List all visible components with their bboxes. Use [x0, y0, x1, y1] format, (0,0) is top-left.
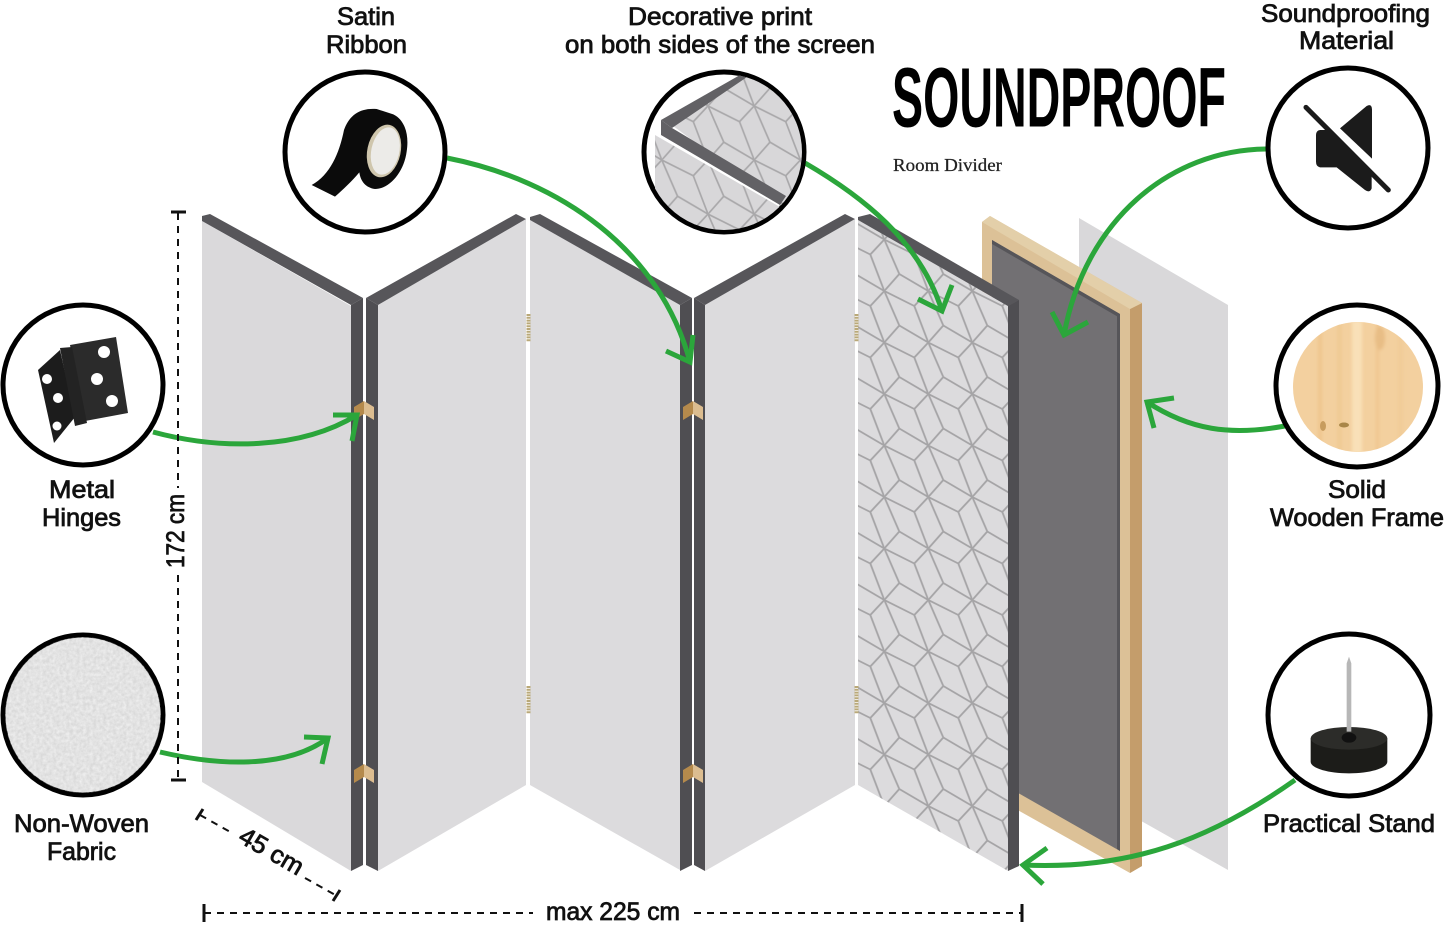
dimension: depth 45 cm: 45 cm — [234, 822, 309, 881]
icon: wood sample — [1290, 320, 1426, 454]
label: satin ribbon — [326, 3, 407, 59]
callout: wooden frame circle — [1276, 305, 1438, 467]
callout: satin ribbon circle — [285, 72, 445, 232]
panel 3 — [530, 214, 692, 871]
label: non-woven fabric: Non-Woven — [14, 810, 149, 838]
dimension: height 172 cm: 172 cm — [162, 494, 190, 568]
icon: metal hinge — [38, 337, 128, 443]
soundproofing panel: grey core — [992, 240, 1120, 851]
dimension: depth 45 cm — [196, 809, 340, 901]
panel 1 — [202, 214, 363, 871]
arrow: metal hinges — [153, 415, 357, 444]
slim hinges — [528, 314, 856, 714]
panel 5: decorative printed side — [858, 214, 1019, 871]
panel 4 — [694, 214, 855, 871]
icon: stand with pin — [1311, 657, 1387, 773]
arrow: solid wooden frame — [1147, 398, 1285, 431]
callout: decorative print circle — [644, 70, 810, 240]
label: metal hinges: Metal — [49, 476, 115, 504]
icon: printed panel corner — [655, 76, 802, 230]
label: metal hinges: Hinges — [42, 504, 121, 532]
dimension: width max 225 cm: max 225 cm — [546, 898, 680, 926]
label: decorative print: Decorative print — [628, 3, 812, 31]
icon: fabric texture — [3, 635, 163, 795]
label: soundproofing material: Soundproofing — [1261, 0, 1430, 28]
label: non-woven fabric — [14, 810, 149, 866]
panel 2 — [366, 214, 526, 871]
arrow: satin ribbon — [447, 158, 693, 362]
icon: ribbon roll — [312, 109, 407, 197]
arrow: soundproofing material — [1052, 149, 1266, 335]
label: non-woven fabric: Fabric — [47, 838, 116, 866]
label: solid wooden frame: Solid — [1328, 476, 1386, 504]
wooden frame — [982, 216, 1142, 873]
callout: non-woven fabric circle — [3, 635, 163, 795]
label: metal hinges — [42, 476, 121, 532]
label: decorative print: on both sides of the screen — [565, 31, 875, 59]
back sheet: non-woven fabric layer — [1079, 218, 1228, 870]
label: soundproofing material: Material — [1299, 27, 1394, 55]
arrow: decorative print — [805, 163, 952, 311]
dimension: height 172 cm — [162, 212, 190, 780]
callout: soundproofing circle — [1268, 68, 1428, 228]
callout: practical stand circle — [1268, 634, 1430, 796]
corner hinges — [354, 401, 703, 783]
arrow: practical stand — [1023, 780, 1295, 884]
label: satin ribbon: Ribbon — [326, 31, 407, 59]
callout: metal hinges circle — [3, 305, 163, 465]
dimension: width max 225 cm — [204, 898, 1022, 926]
label: soundproofing material — [1261, 0, 1430, 55]
arrow: non-woven fabric — [160, 737, 328, 764]
label: solid wooden frame — [1270, 476, 1444, 532]
label: practical stand: Practical Stand — [1263, 810, 1435, 838]
label: solid wooden frame: Wooden Frame — [1270, 504, 1444, 532]
subtitle: Room Divider — [893, 155, 1002, 175]
icon: muted speaker — [1306, 105, 1388, 191]
label: satin ribbon: Satin — [337, 3, 395, 31]
label: decorative print — [565, 3, 875, 59]
